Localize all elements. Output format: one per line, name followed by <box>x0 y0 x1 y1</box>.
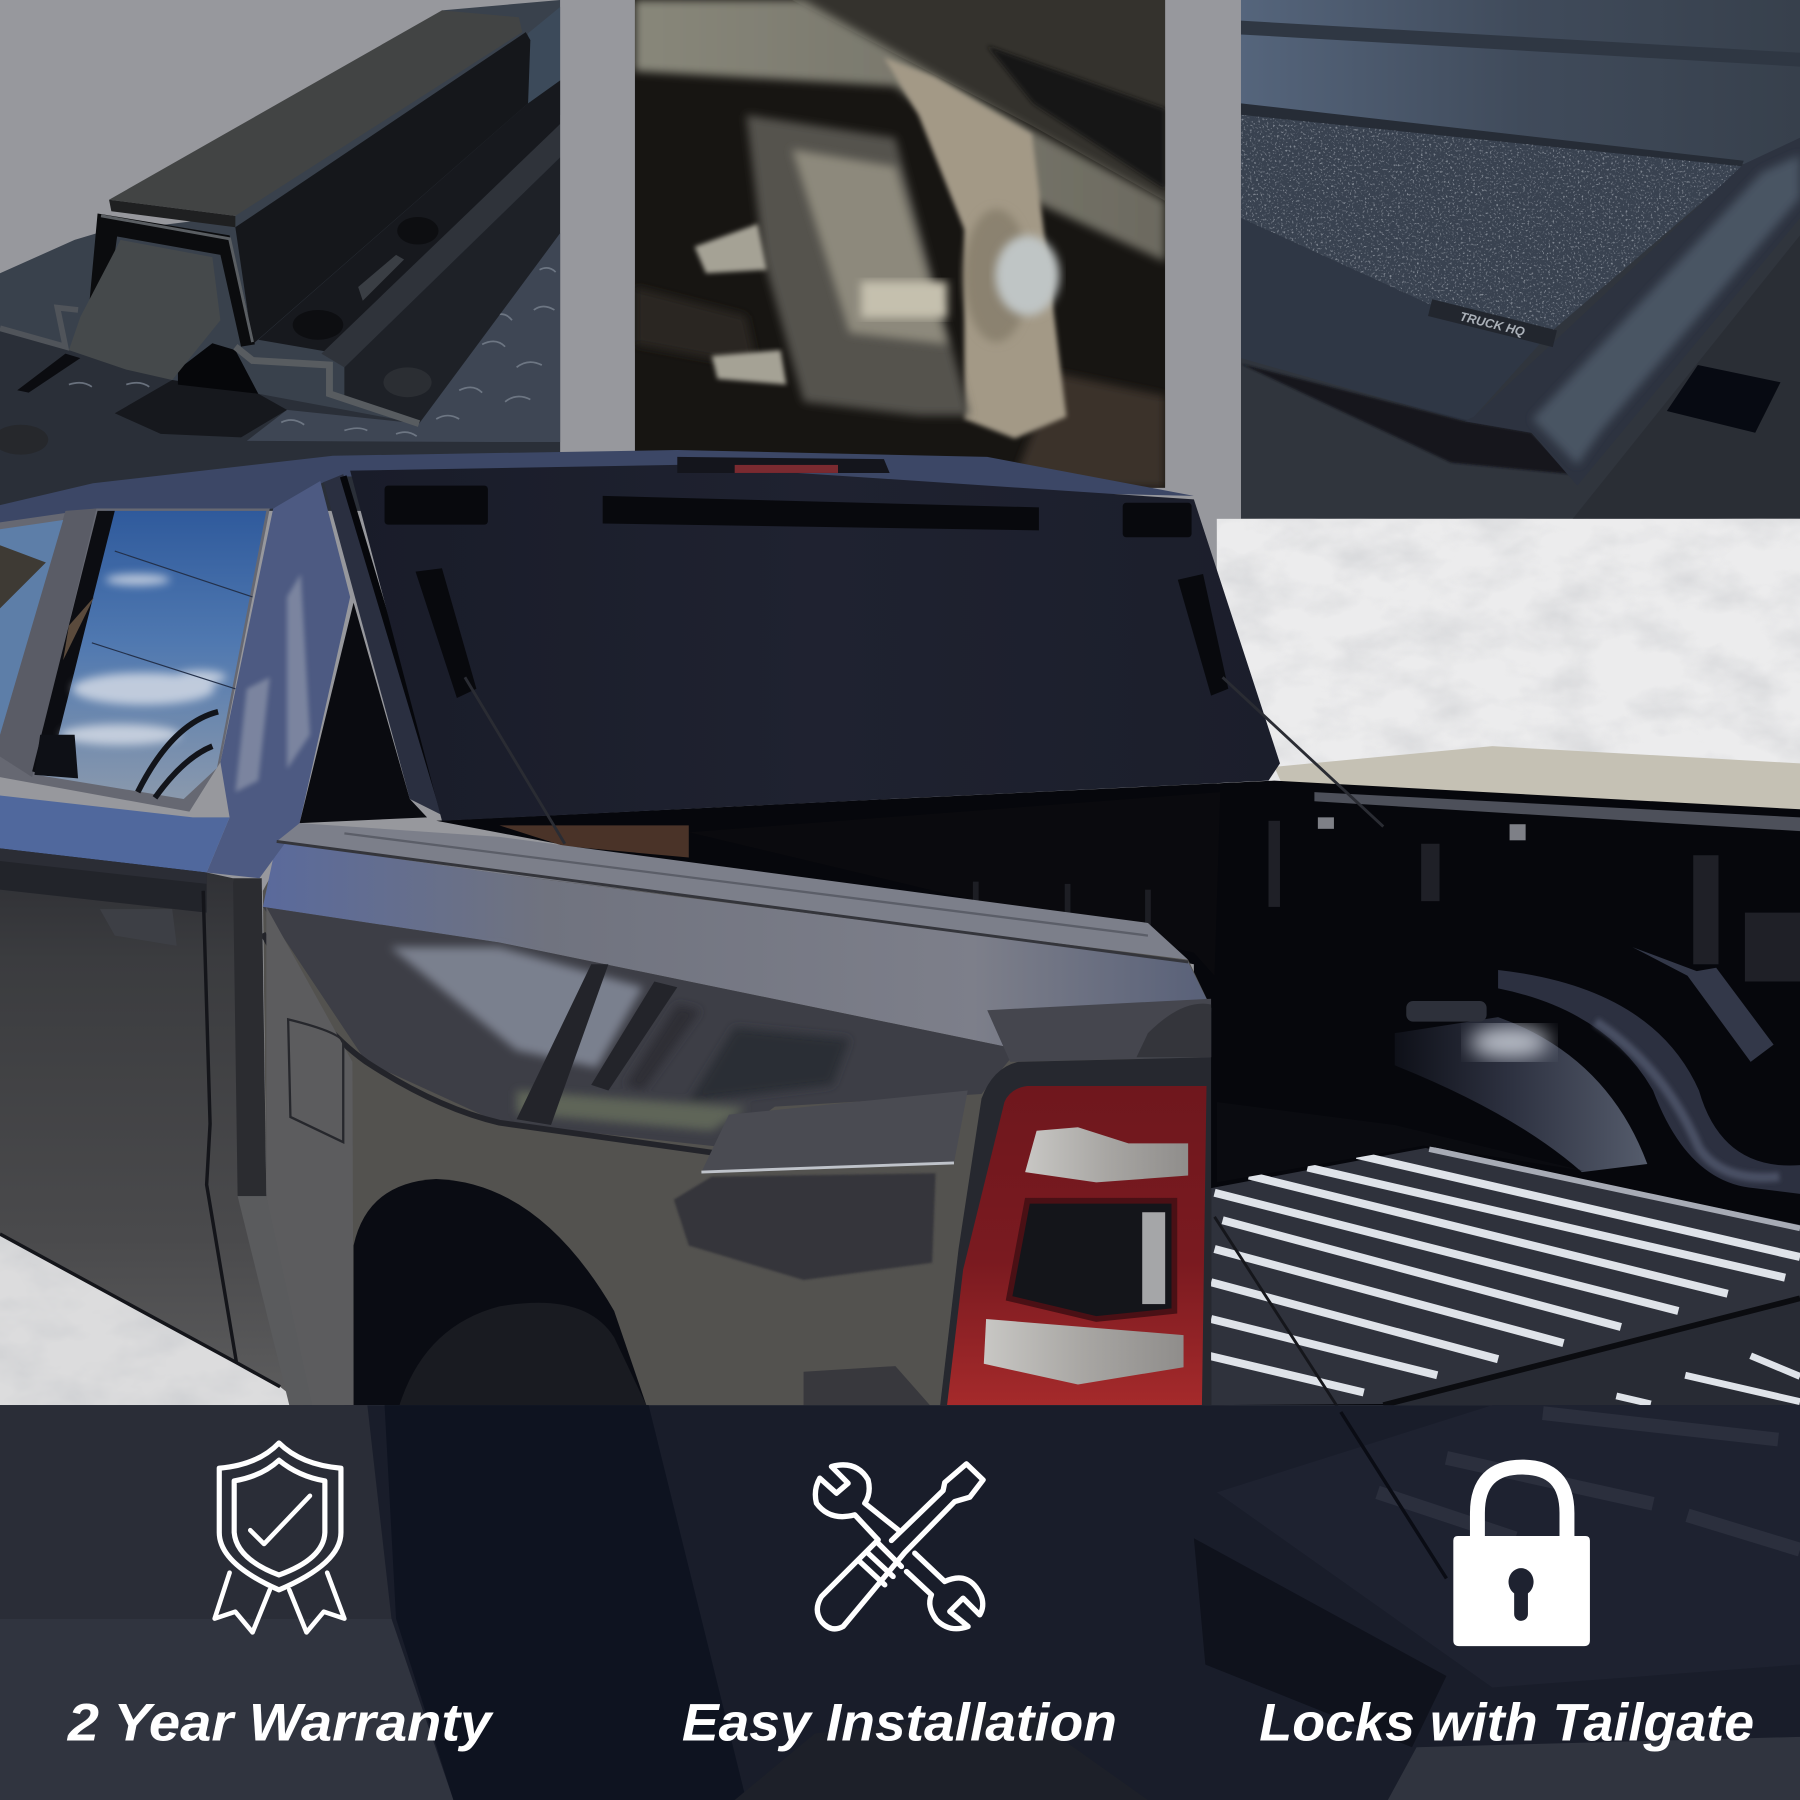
wheel hump <box>1395 1017 1647 1172</box>
wheel arch <box>354 1179 646 1405</box>
feature: lock <box>1259 1467 1754 1752</box>
panel texture <box>1241 115 1746 339</box>
rear door <box>0 848 303 1405</box>
bed floor <box>1211 1148 1800 1405</box>
feature: installation <box>682 1464 1117 1752</box>
textured wall: lower left <box>0 1217 344 1412</box>
badge: logo: TRUCK HQ <box>1458 309 1526 339</box>
rear quarter panel <box>263 823 1211 1405</box>
textured wall: upper right <box>1217 519 1800 821</box>
cab window <box>32 511 266 799</box>
bed rail cap <box>277 823 1188 960</box>
label: installation: Easy Installation <box>682 1693 1117 1752</box>
label: lock: Locks with Tailgate <box>1259 1693 1754 1752</box>
wall brackets <box>1268 821 1800 982</box>
tire <box>399 1303 646 1405</box>
tail light <box>940 1057 1211 1405</box>
window frames <box>0 509 270 812</box>
truck <box>0 450 1800 1412</box>
photo: latch rail detail <box>0 0 560 511</box>
tailgate <box>1383 1298 1800 1405</box>
label: warranty: 2 Year Warranty <box>67 1693 494 1752</box>
upper wheel arch <box>1632 947 1774 1062</box>
door handle <box>100 909 177 946</box>
cab upper <box>0 450 1194 884</box>
gap behind cab <box>300 603 427 823</box>
dark overlay footer panel <box>0 1405 1800 1800</box>
cover clamps <box>385 486 1228 698</box>
B pillar <box>233 878 266 1196</box>
door seam <box>0 891 280 1387</box>
bed rail highlight <box>1314 792 1800 831</box>
icon: crossed wrench and screwdriver <box>815 1464 983 1629</box>
feature: warranty <box>67 1443 494 1752</box>
photo: cover corner detail <box>1241 0 1800 519</box>
photo: clamp bracket detail <box>635 0 1165 488</box>
icon: padlock <box>1453 1467 1590 1646</box>
badge: logo <box>1428 299 1557 347</box>
support cables <box>465 677 1383 1412</box>
icon: shield with ribbon <box>215 1443 344 1632</box>
truck bed interior <box>436 781 1800 1405</box>
tonneau cover raised <box>324 457 1383 1412</box>
fuel door <box>288 1019 343 1142</box>
door dark reflection band <box>0 844 207 913</box>
